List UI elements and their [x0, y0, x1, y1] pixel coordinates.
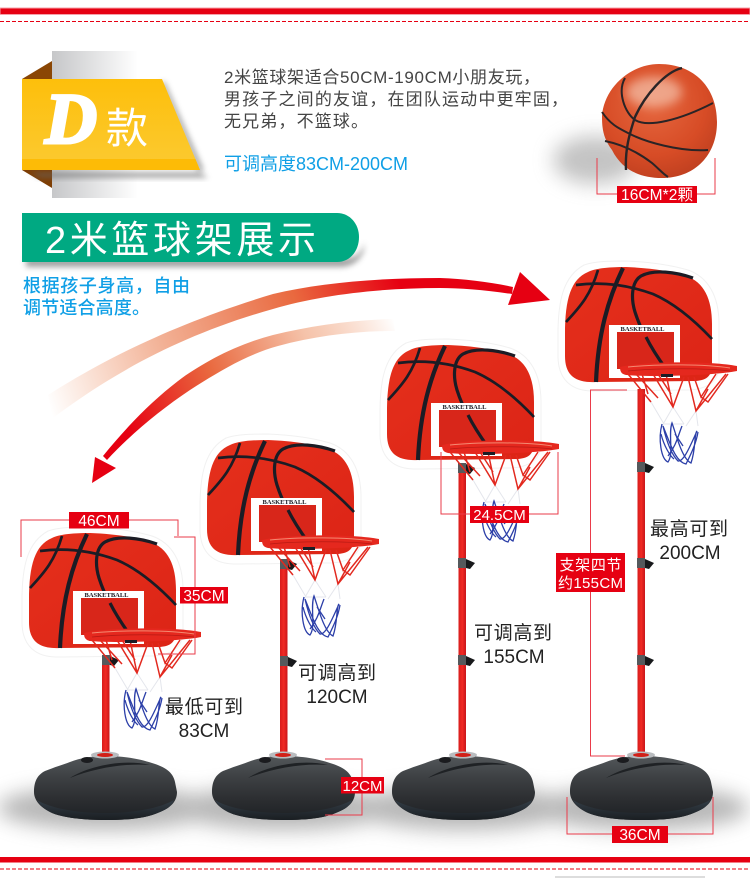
- product description text: 男孩子之间的友谊，在团队运动中更牢固，: [224, 90, 568, 109]
- dimension: backboard width 46CM: [21, 512, 178, 557]
- dimension: pole length 155CM: 支架四节: [560, 557, 622, 574]
- dimension: backboard height 35CM: 35CM: [183, 588, 225, 605]
- hoop stand: 120CM: [200, 434, 379, 820]
- arrow: downward swoosh: [92, 319, 395, 483]
- height label: 155CM: [474, 622, 552, 668]
- basketball photo: [553, 64, 717, 204]
- dimension: base width 36CM: [567, 797, 713, 844]
- height label: 200CM: 最高可到: [650, 518, 728, 540]
- badge letter: D: [44, 79, 97, 159]
- bottom border stripe: [0, 857, 750, 878]
- height label: 83CM: [165, 696, 243, 742]
- hoop stand: 200CM: [558, 261, 737, 820]
- hoop stand: 200CM: BASKETBALL: [620, 326, 665, 333]
- height label: 83CM: 最低可到: [165, 696, 243, 718]
- dimension: pole length 155CM: [556, 390, 627, 756]
- dimension: pole length 155CM: 约155CM: [558, 575, 623, 592]
- height label: 120CM: [298, 662, 376, 708]
- product description text: 无兄弟，不篮球。: [224, 112, 368, 131]
- badge word: 款: [106, 105, 148, 152]
- adjustable height note: 可调高度83CM-200CM: [224, 154, 408, 174]
- arrow: upward swoosh: [48, 272, 550, 418]
- height label: 83CM: 83CM: [179, 721, 229, 742]
- hoop stand: 155CM: BASKETBALL: [442, 404, 487, 411]
- height label: 200CM: [650, 518, 728, 564]
- blue instruction text: 调节适合高度。: [23, 298, 150, 318]
- height label: 155CM: 155CM: [483, 647, 545, 668]
- product description text: 2米篮球架适合50CM-190CM小朋友玩，: [224, 68, 540, 87]
- floor shadows: [0, 786, 749, 830]
- dimension: base width 36CM: 36CM: [619, 827, 661, 844]
- height label: 155CM: 可调高到: [474, 622, 552, 644]
- height label: 120CM: 120CM: [306, 687, 368, 708]
- badge: D款 ribbon: [22, 51, 208, 198]
- dimension: backboard width 46CM: 46CM: [78, 513, 120, 530]
- top border stripe: [0, 8, 750, 22]
- hoop stand: 155CM: [380, 339, 559, 820]
- dimension: backboard height 35CM: [158, 537, 228, 654]
- dimension: rim diameter 24.5CM: 24.5CM: [473, 507, 526, 524]
- height label: 200CM: 200CM: [659, 543, 721, 564]
- height label: 120CM: 可调高到: [298, 662, 376, 684]
- ball size label: 16CM*2颗: [621, 186, 693, 204]
- ball size bracket: [597, 158, 715, 194]
- section banner: [22, 213, 364, 267]
- blue instruction text: [23, 276, 190, 318]
- banner title: 2米篮球架展示: [45, 220, 316, 262]
- product description text: [224, 68, 568, 131]
- hoop stand: 83CM: [22, 527, 201, 820]
- dimension: base height 12CM: 12CM: [342, 778, 383, 795]
- dimension: rim diameter 24.5CM: [441, 452, 558, 524]
- blue instruction text: 根据孩子身高，自由: [23, 276, 190, 296]
- hoop stand: 83CM: BASKETBALL: [84, 592, 129, 599]
- hoop stand: 120CM: BASKETBALL: [262, 499, 307, 506]
- dimension: base height 12CM: [325, 759, 384, 815]
